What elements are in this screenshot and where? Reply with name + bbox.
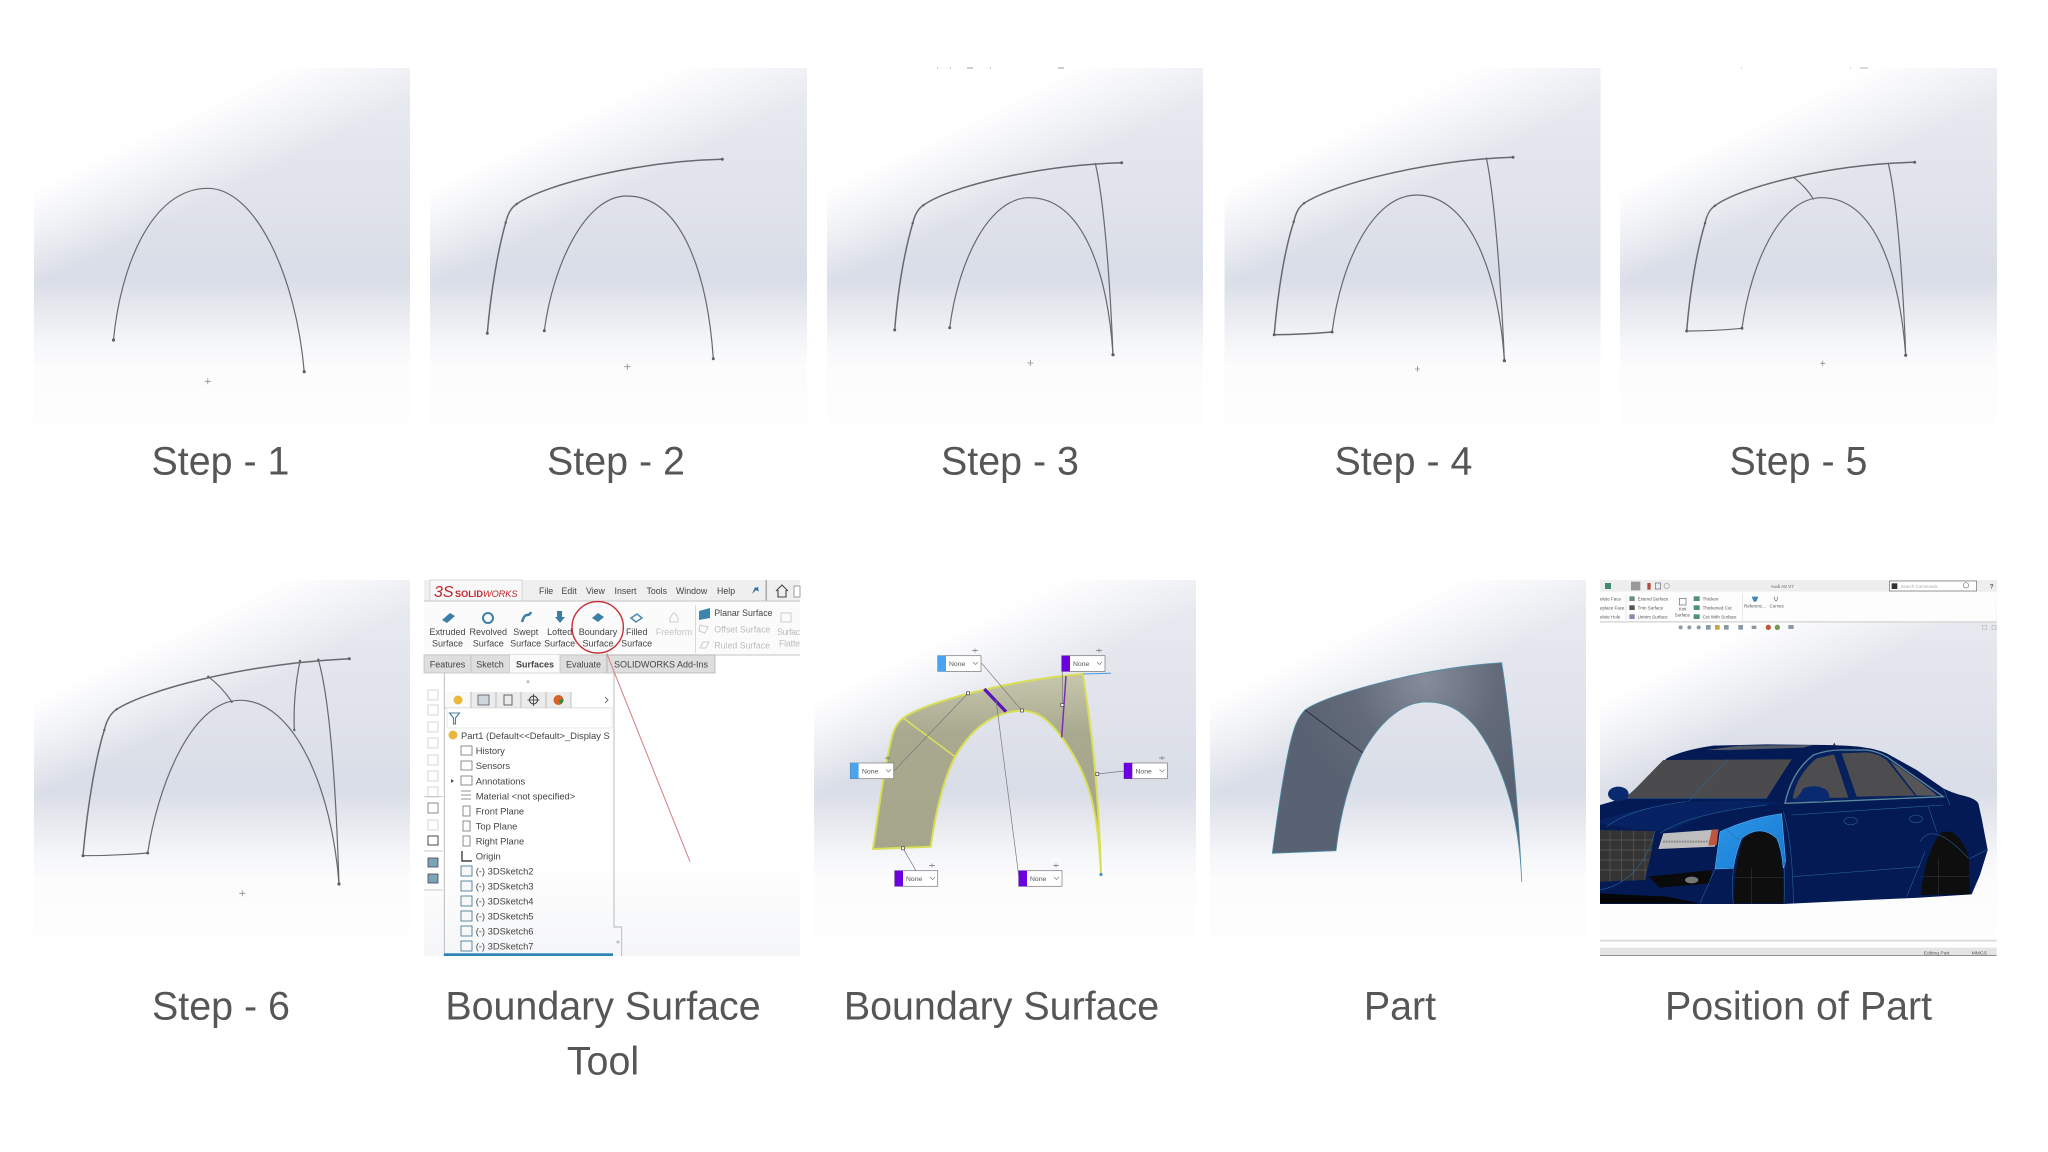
menu bar: 3S	[434, 584, 454, 601]
ribbon: Surface	[473, 638, 504, 648]
label: Boundary Surface	[844, 984, 1159, 1028]
viewport background	[34, 68, 410, 444]
ribbon: Extend Surface	[1638, 596, 1669, 601]
feature manager tree: History	[476, 745, 505, 756]
connector callouts: None	[1136, 768, 1152, 776]
panel: boundary surface	[814, 580, 1196, 1028]
feature manager tree: Annotations	[476, 776, 526, 786]
connector callouts: None	[906, 876, 922, 883]
surface preview	[873, 673, 1111, 876]
ribbon: Surfac	[777, 627, 801, 637]
sketch: wheel arch curve	[112, 188, 306, 384]
connector callouts	[850, 648, 1167, 886]
viewport background	[1600, 580, 1997, 956]
feature manager tree	[444, 673, 622, 956]
label: Step - 1	[152, 440, 289, 484]
screenshot contents	[1600, 580, 1997, 956]
title bar	[1600, 580, 1997, 592]
panel lines	[1600, 759, 1987, 903]
panel: part	[1210, 580, 1586, 1028]
panel: step 5	[1620, 68, 1997, 484]
title bar: Search Commands	[1901, 584, 1938, 589]
sketch: profile with centre connector	[1685, 68, 1916, 366]
title bar: ?	[1990, 584, 1994, 591]
ribbon: Lofted	[547, 627, 572, 637]
label: Step - 5	[1730, 440, 1867, 484]
ribbon: Thickened Cut	[1703, 605, 1732, 610]
panel: step 3	[827, 68, 1203, 484]
ribbon: Surface	[1675, 613, 1691, 618]
ribbon: Surface	[621, 638, 652, 648]
label: Step - 4	[1335, 440, 1472, 484]
ribbon: elete Face	[1600, 596, 1621, 601]
car body	[1600, 743, 1988, 904]
feature manager tree: Sensors	[476, 760, 510, 771]
sketch: profile with two connectors	[82, 657, 351, 896]
command manager tabs: Features	[430, 660, 466, 670]
ribbon: Trim Surface	[1638, 605, 1664, 610]
ribbon: Thicken	[1703, 596, 1719, 601]
viewport background	[827, 68, 1203, 444]
menu bar: Insert	[614, 586, 637, 596]
ribbon: Knit	[1679, 606, 1687, 611]
label: Boundary Surface	[445, 984, 761, 1028]
ribbon: Untrim Surface	[1638, 614, 1668, 619]
sketch: arch, top curve and rear edge	[893, 68, 1123, 366]
viewport background	[430, 68, 807, 444]
label: Step - 6	[152, 984, 290, 1028]
ribbon: Planar Surface	[714, 608, 773, 618]
view toolbar	[1679, 625, 1996, 630]
ribbon	[424, 601, 801, 655]
sketch: arch and top curve	[486, 158, 724, 370]
ribbon: Cut With Surface	[1703, 614, 1737, 619]
panel: step 4	[1224, 68, 1600, 484]
menu bar: Tools	[646, 586, 668, 596]
feature manager tree: (-) 3DSketch5	[476, 910, 534, 922]
title bar: Audi A8 V7	[1771, 584, 1794, 589]
ribbon: Filled	[626, 627, 647, 637]
menu bar: Window	[676, 586, 708, 596]
window background	[424, 580, 800, 956]
ribbon	[1600, 592, 1997, 623]
ribbon: Surface	[432, 638, 463, 648]
viewport background	[814, 580, 1196, 956]
feature manager tree: Right Plane	[476, 836, 524, 846]
highlighted fender	[1715, 814, 1786, 869]
ribbon: Curves	[1770, 604, 1785, 609]
viewport background	[1210, 580, 1586, 956]
label: Position of Part	[1665, 984, 1932, 1028]
menu bar: View	[586, 586, 606, 596]
ribbon: Flatte	[779, 638, 800, 648]
connector callouts: None	[862, 768, 878, 776]
ribbon: elete Hole	[1600, 614, 1621, 619]
label: Step - 3	[941, 440, 1079, 484]
viewport background	[1620, 68, 1997, 444]
label: Tool	[567, 1040, 639, 1084]
command manager tabs: SOLIDWORKS Add-Ins	[614, 660, 709, 670]
command manager tabs: Evaluate	[566, 660, 601, 670]
feature manager tree: Front Plane	[476, 806, 524, 816]
ribbon: Surface	[582, 638, 614, 648]
label: Part	[1364, 984, 1436, 1028]
menu bar: Edit	[562, 586, 577, 596]
label	[445, 984, 761, 1084]
command manager tabs: Sketch	[476, 660, 504, 670]
ribbon: eplace Face	[1600, 605, 1625, 610]
feature manager tree: (-) 3DSketch6	[476, 926, 534, 936]
connector callouts: None	[1073, 661, 1089, 668]
panel: step 6	[34, 580, 410, 1028]
label: Step - 2	[547, 440, 685, 484]
wheels	[1733, 832, 1970, 903]
ribbon: Extruded	[429, 627, 466, 637]
panel: position of part	[1600, 580, 1997, 1028]
feature manager tree: (-) 3DSketch7	[476, 940, 534, 952]
fender surface	[1272, 663, 1522, 882]
menu bar	[424, 580, 800, 602]
ribbon: Offset Surface	[714, 624, 770, 634]
callout: red circle and leader	[572, 602, 690, 862]
panel: step 1	[34, 68, 410, 484]
menu bar: Help	[717, 586, 735, 596]
ribbon: Surface	[510, 638, 541, 648]
sketch: closed profile with rear edge	[1273, 156, 1514, 372]
feature manager tree: (-) 3DSketch3	[476, 880, 534, 892]
feature manager tree: Top Plane	[476, 820, 517, 832]
command manager tabs: Surfaces	[516, 660, 554, 670]
ribbon: Freeform	[656, 627, 692, 637]
view toolbar strip	[424, 690, 443, 890]
viewport background	[34, 580, 410, 956]
connector callouts: None	[949, 661, 965, 668]
feature manager tree: Part1 (Default<<Default>_Display S	[461, 730, 610, 741]
status bar: MMGS	[1972, 950, 1988, 956]
panel: boundary surface tool	[424, 580, 801, 1084]
feature manager tree: (-) 3DSketch2	[476, 866, 534, 876]
panel: step 2	[430, 68, 807, 484]
ribbon: Swept	[513, 627, 539, 637]
menu bar: File	[539, 586, 553, 596]
status bar	[1600, 940, 1997, 956]
ribbon: Boundary	[579, 627, 618, 637]
ribbon: Ruled Surface	[714, 640, 770, 650]
viewport background	[1224, 68, 1600, 444]
ribbon: Revolved	[470, 627, 507, 637]
status bar: Editing Part	[1924, 950, 1950, 956]
ribbon: Surface	[544, 638, 575, 648]
grille and front details	[1600, 829, 1718, 903]
connector lines	[894, 663, 1125, 878]
connector callouts: None	[1030, 876, 1046, 883]
command manager tabs	[424, 655, 715, 673]
feature manager tree: (-) 3DSketch4	[476, 896, 534, 906]
menu bar: SOLIDWORKS	[455, 589, 518, 600]
feature manager tree: Origin	[476, 850, 501, 862]
feature manager tree: Material <not specified>	[476, 790, 576, 802]
ribbon: Referenc...	[1744, 604, 1766, 609]
